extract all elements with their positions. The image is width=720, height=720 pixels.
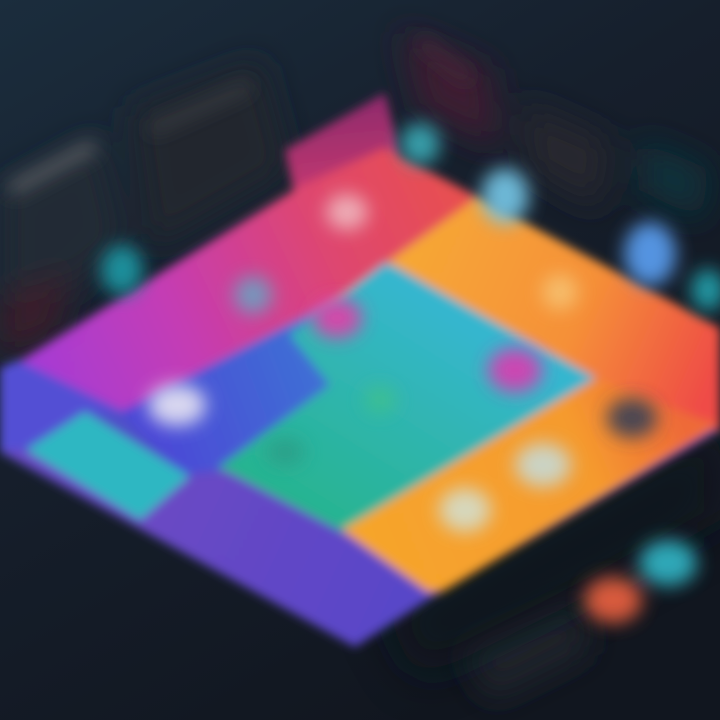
- dot: bright blue right: [624, 222, 676, 286]
- dot: teal top: [400, 123, 440, 165]
- block: magenta tab: [285, 93, 405, 222]
- dot: pale lower: [439, 488, 491, 532]
- dot: pale blue lower: [515, 443, 571, 487]
- dot: orange bottom right: [584, 577, 642, 623]
- dot: teal right edge: [691, 269, 720, 311]
- dot: teal bottom right: [639, 540, 697, 586]
- dot: teal left: [101, 245, 143, 295]
- panel: blue center left: [120, 295, 400, 478]
- panel: orange to red upper right: [388, 197, 720, 432]
- panel: orange bottom right: [342, 378, 720, 592]
- dot: pale pink top: [326, 194, 368, 230]
- dot: magenta center: [312, 298, 362, 338]
- node dots: [101, 123, 720, 623]
- dashboard board: [0, 93, 720, 647]
- panel: teal green center: [218, 262, 596, 535]
- dot: green lower center: [265, 438, 305, 466]
- grey label bars on panels: [10, 40, 470, 190]
- dot: magenta right: [488, 348, 542, 392]
- panel: purple to red strip: [18, 148, 478, 415]
- dot: pale orange: [542, 274, 578, 310]
- board shadow: [380, 420, 720, 680]
- dot: dark right: [607, 398, 657, 438]
- dot: steel center: [234, 276, 272, 314]
- board base: [0, 165, 720, 647]
- dot: light blue: [481, 168, 529, 224]
- panel: violet left tip: [0, 360, 125, 452]
- dot: white left: [148, 384, 206, 426]
- dot: green center: [364, 386, 396, 414]
- panel: purple bottom: [0, 450, 432, 647]
- panel: teal lower left: [26, 412, 192, 520]
